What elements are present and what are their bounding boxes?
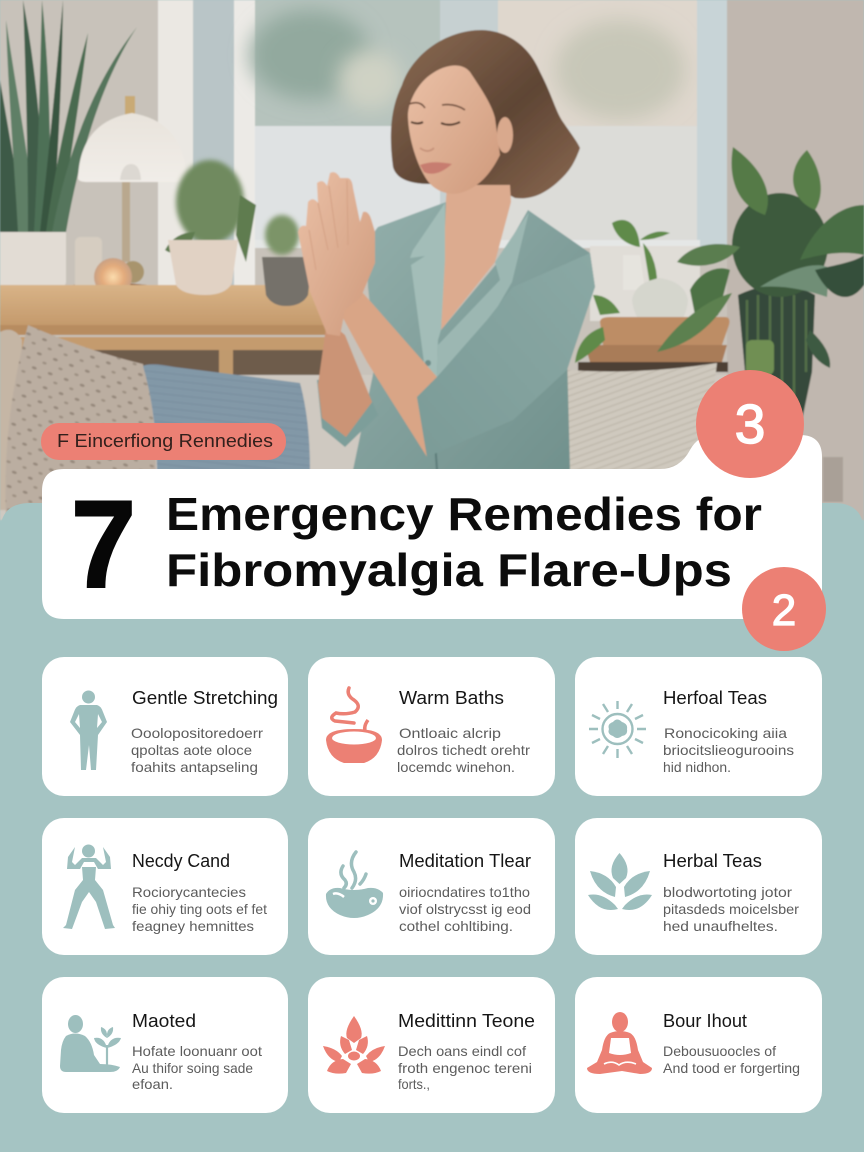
card: Herbal Teas: Herbal Teas — [663, 851, 762, 871]
room walls — [0, 0, 864, 520]
icon: teal steaming bowl — [326, 852, 383, 918]
description — [132, 884, 267, 934]
card: Bour Ihout: Bour Ihout — [663, 1011, 747, 1031]
card: Gentle Stretching: Gentle Stretching — [132, 688, 278, 708]
icon: steaming bowl — [326, 688, 382, 763]
woman: shirt and torso — [353, 202, 595, 470]
card: Maoted: Maoted — [132, 1011, 196, 1031]
photo: woman stretching in a living room — [0, 0, 864, 520]
number badge 3 — [696, 370, 804, 478]
description: hed unaufheltes. — [663, 918, 778, 934]
description — [132, 1043, 262, 1092]
number badge 3: 3 — [735, 393, 765, 455]
number badge 2 — [742, 567, 826, 651]
card: Bour Ihout — [575, 977, 822, 1113]
card: Necdy Cand — [42, 818, 288, 955]
headline — [166, 488, 762, 596]
fluffy throw — [555, 363, 717, 475]
description: Debousuoocles of — [663, 1043, 776, 1059]
headline: Fibromyalgia Flare-Ups — [166, 544, 732, 596]
table lamp and candle — [45, 96, 186, 305]
card: Warm Baths — [308, 657, 555, 796]
description — [398, 1043, 532, 1092]
teal background panel — [0, 503, 864, 1152]
card: Medittinn Teone — [308, 977, 555, 1113]
description — [397, 725, 530, 775]
big number 7: 7 — [71, 476, 136, 614]
number badge 2: 2 — [772, 586, 796, 635]
description: foahits antapseling — [131, 759, 258, 775]
woman: hair back — [391, 30, 580, 198]
description: dolros tichedt orehtr — [397, 742, 530, 758]
description: Ontloaic alcrip — [399, 725, 501, 741]
snake plant and pot — [0, 0, 137, 293]
card: Maoted — [42, 977, 288, 1113]
description: Hofate loonuanr oot — [132, 1043, 262, 1059]
icon: standing person — [70, 690, 107, 770]
description: Rociorycantecies — [132, 884, 246, 900]
description: locemdc winehon. — [397, 759, 515, 775]
window — [158, 0, 727, 321]
description: feagney hemnittes — [132, 918, 254, 934]
card: Medittinn Teone: Medittinn Teone — [398, 1011, 535, 1031]
description: efoan. — [132, 1076, 173, 1092]
description: forts., — [398, 1076, 430, 1092]
description: Dech oans eindl cof — [398, 1043, 526, 1059]
description — [663, 884, 799, 934]
woman: arms and praying hands — [298, 172, 595, 457]
description: oiriocndatires to1tho — [399, 884, 530, 900]
description: Au thifor soing sade — [132, 1060, 253, 1076]
headline: Emergency Remedies for — [166, 488, 762, 540]
woman: neck and face — [408, 66, 513, 330]
potted herbs — [165, 160, 312, 306]
description: briocitslieogurooins — [663, 742, 794, 758]
icon: person stretching arms overhead — [63, 844, 115, 929]
icon: coral meditating figure — [587, 1012, 652, 1074]
description: cothel cohltibing. — [399, 918, 513, 934]
description — [663, 725, 794, 775]
blue cushion — [143, 364, 310, 470]
description: qpoltas aote oloce — [131, 742, 252, 758]
category pill — [41, 423, 286, 460]
description — [399, 884, 531, 934]
description — [663, 1043, 800, 1076]
description — [131, 725, 263, 775]
title card — [42, 435, 822, 619]
category pill: F Eincerfiong Rennedies — [57, 431, 273, 451]
card: Warm Baths: Warm Baths — [399, 688, 504, 708]
card: Herfoal Teas — [575, 657, 822, 796]
description: hid nidhon. — [663, 759, 731, 775]
sofa and cushions — [0, 325, 843, 520]
description: pitasdeds moicelsber — [663, 901, 799, 917]
description: viof olstrycsst ig eod — [399, 901, 531, 917]
card: Herbal Teas — [575, 818, 822, 955]
wooden console table — [0, 285, 330, 378]
card: Meditation Tlear — [308, 818, 555, 955]
icon: coral lotus — [323, 1016, 385, 1074]
description: fie ohiy ting oots ef fet — [132, 901, 267, 917]
card: Herfoal Teas: Herfoal Teas — [663, 688, 767, 708]
description: And tood er forgerting — [663, 1060, 800, 1076]
icon: leaves — [588, 853, 652, 910]
description: Ronocicoking aiia — [664, 725, 787, 741]
card: Necdy Cand: Necdy Cand — [132, 851, 230, 871]
card: Meditation Tlear: Meditation Tlear — [399, 851, 531, 871]
description: blodwortoting jotor — [663, 884, 792, 900]
description: Ooolopositoredoerr — [131, 725, 263, 741]
knit cushion — [0, 330, 22, 510]
description: froth engenoc tereni — [398, 1060, 532, 1076]
icon: sun with flower — [589, 701, 646, 758]
icon: seated person with plant — [60, 1015, 121, 1072]
leafy plant, vase and bowl on right — [575, 147, 864, 430]
card: Gentle Stretching — [42, 657, 288, 796]
